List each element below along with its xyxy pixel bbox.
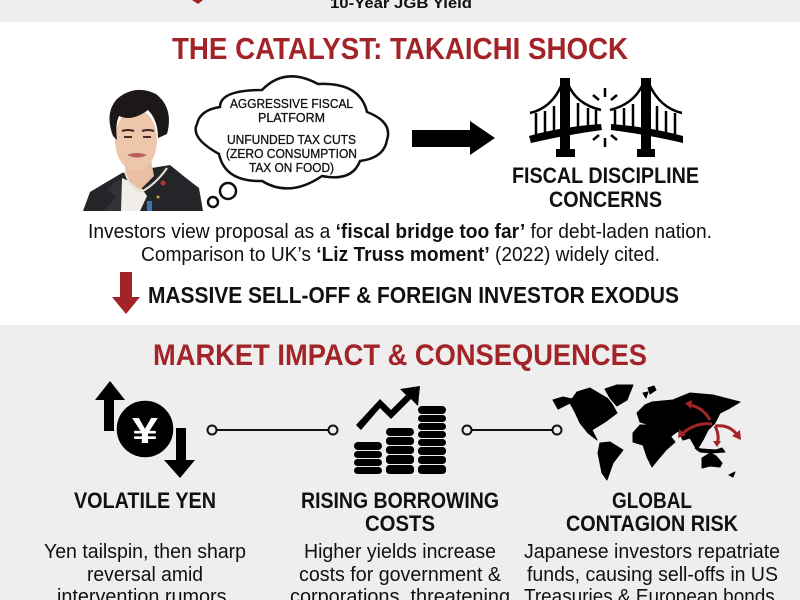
column: global contagion risk [524, 488, 780, 600]
panel: market impact [0, 325, 800, 600]
column: global contagion risk: CONTAGION RISK [566, 511, 738, 536]
thought cloud with policy text: AGGRESSIVE FISCAL [230, 96, 353, 111]
column: rising borrowing costs: Higher yields increase [304, 541, 496, 563]
callout: massive sell-off: MASSIVE SELL-OFF & FOREIGN INVESTOR EXODUS [148, 282, 679, 308]
column: rising borrowing costs: RISING BORROWING [301, 488, 499, 513]
column: global contagion risk: Japanese investors repatriate [524, 541, 780, 563]
heading: the catalyst: THE CATALYST: TAKAICHI SHOCK [172, 31, 629, 66]
column: global contagion risk: GLOBAL [612, 488, 692, 513]
label: fiscal discipline concerns: FISCAL DISCIPLINE [512, 163, 699, 188]
text block: investor view: Investors view proposal as a ‘fiscal bridge too far’ for debt-laden nation. [88, 221, 712, 243]
top strip: cropped previous section [0, 0, 800, 22]
heading: market impact: MARKET IMPACT & CONSEQUENCES [153, 339, 647, 372]
text block: investor view: Comparison to UK’s ‘Liz Truss moment’ (2022) widely cited. [141, 244, 660, 266]
icon: yen with up and down arrows [95, 381, 195, 478]
text block: investor view [88, 221, 712, 266]
portrait: Takaichi illustration [83, 90, 203, 211]
thought cloud with policy text: PLATFORM [258, 110, 325, 125]
column: rising borrowing costs: COSTS [365, 511, 435, 536]
thought cloud with policy text: UNFUNDED TAX CUTS [227, 132, 356, 147]
icon: yen with up and down arrows: ¥ [132, 410, 158, 451]
arrow: red down [112, 272, 140, 314]
thought cloud with policy text [196, 76, 388, 207]
thought cloud with policy text: (ZERO CONSUMPTION [226, 146, 357, 161]
column: volatile yen: Yen tailspin, then sharp [44, 541, 246, 563]
column: rising borrowing costs: costs for government & [299, 564, 502, 586]
column: volatile yen [44, 488, 246, 600]
column: rising borrowing costs [290, 488, 510, 600]
connector: yen to borrowing [208, 426, 338, 434]
column: global contagion risk: funds, causing sell-offs in US [527, 564, 778, 586]
icon: world map with red arrows [553, 385, 741, 480]
icon: broken bridge [529, 78, 683, 157]
column: volatile yen: reversal amid [87, 564, 203, 586]
label: fiscal discipline concerns: CONCERNS [549, 187, 662, 212]
thought cloud with policy text: TAX ON FOOD) [249, 160, 334, 175]
column: volatile yen: VOLATILE YEN [74, 488, 216, 513]
label: fiscal discipline concerns [512, 163, 699, 212]
icon: coin stacks and rising arrow [354, 386, 446, 474]
connector: borrowing to contagion [462, 426, 562, 434]
arrow: platform to concerns [412, 121, 495, 155]
